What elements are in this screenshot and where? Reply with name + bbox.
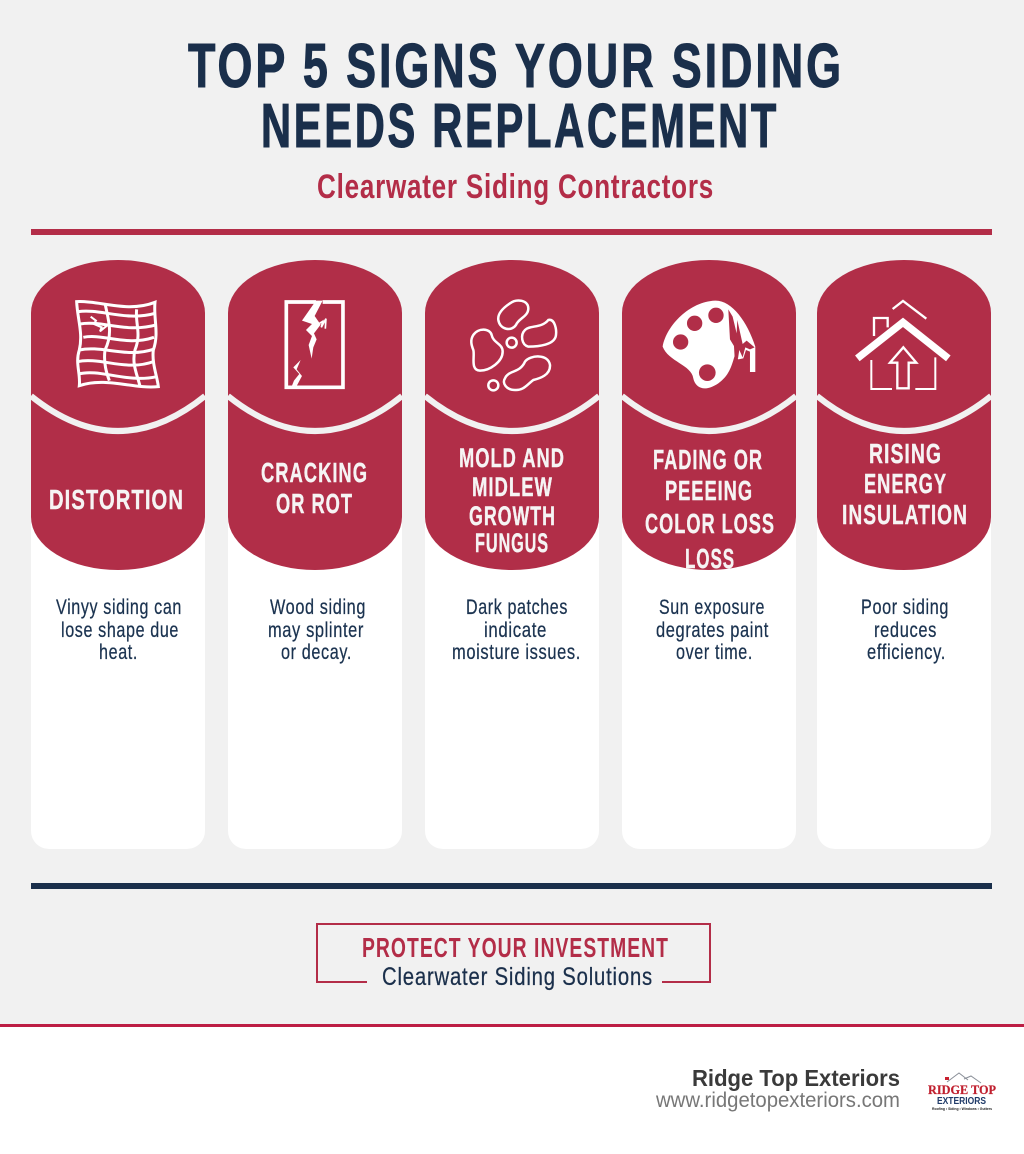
label: OR ROT xyxy=(276,488,353,519)
description: efficiency. xyxy=(867,641,946,664)
title: NEEDS REPLACEMENT xyxy=(261,92,779,161)
icon: cracked panel xyxy=(286,301,343,387)
description: lose shape due xyxy=(61,619,179,642)
panel: distortion xyxy=(31,260,205,849)
icon: mold patches xyxy=(471,301,556,390)
description: may splinter xyxy=(268,619,364,642)
company name: Ridge Top Exteriors xyxy=(692,1065,900,1091)
label: DISTORTION xyxy=(49,484,184,515)
logo: RIDGE TOP xyxy=(928,1083,996,1097)
description: over time. xyxy=(676,641,753,664)
description xyxy=(656,596,769,664)
title xyxy=(188,32,844,161)
panel: cracking or rot xyxy=(228,260,402,849)
description: heat. xyxy=(99,641,138,664)
description: Dark patches xyxy=(466,596,568,619)
description: moisture issues. xyxy=(452,641,581,664)
description: Poor siding xyxy=(861,596,949,619)
description xyxy=(452,596,581,664)
callout: protect your investment xyxy=(317,924,710,991)
label: FUNGUS xyxy=(475,528,549,558)
panel: mold and mildew xyxy=(425,260,599,849)
callout: protect your investment: PROTECT YOUR INVESTMENT xyxy=(362,932,669,963)
footer xyxy=(0,1024,1024,1154)
label xyxy=(459,443,565,558)
icon: warped siding grid xyxy=(77,302,158,387)
logo xyxy=(928,1073,996,1111)
website: www.ridgetopexteriors.com xyxy=(655,1088,900,1112)
logo: EXTERIORS xyxy=(937,1095,986,1107)
description: indicate xyxy=(484,619,547,642)
description: or decay. xyxy=(281,641,352,664)
logo: Roofing • Siding • Windows • Gutters xyxy=(932,1107,992,1111)
callout: protect your investment: Clearwater Siding Solutions xyxy=(382,963,653,991)
label: INSULATION xyxy=(842,499,968,530)
label: MOLD AND xyxy=(459,443,565,473)
label: CRACKING xyxy=(261,457,368,488)
label: LOSS xyxy=(685,543,735,574)
description xyxy=(861,596,949,664)
icon: house with rising arrow xyxy=(857,301,948,389)
label: COLOR LOSS xyxy=(645,508,775,539)
description xyxy=(268,596,366,664)
panel: fading or peeling xyxy=(622,260,796,849)
description: Wood siding xyxy=(270,596,366,619)
description: degrates paint xyxy=(656,619,769,642)
label xyxy=(261,457,368,519)
description xyxy=(56,596,182,664)
label: MIDLEW xyxy=(472,472,553,502)
description: Sun exposure xyxy=(659,596,765,619)
description: Vinyy siding can xyxy=(56,596,182,619)
label: FADING OR xyxy=(653,444,763,475)
label xyxy=(645,444,775,574)
label: GROWTH xyxy=(469,501,556,531)
panel: rising energy xyxy=(817,260,991,849)
icon: paint palette xyxy=(663,301,755,388)
subtitle: Clearwater Siding Contractors xyxy=(317,168,714,206)
label xyxy=(842,438,968,530)
description: reduces xyxy=(874,619,937,642)
label: RISING xyxy=(869,438,942,469)
label: PEEEING xyxy=(665,475,753,506)
label: ENERGY xyxy=(864,468,947,499)
